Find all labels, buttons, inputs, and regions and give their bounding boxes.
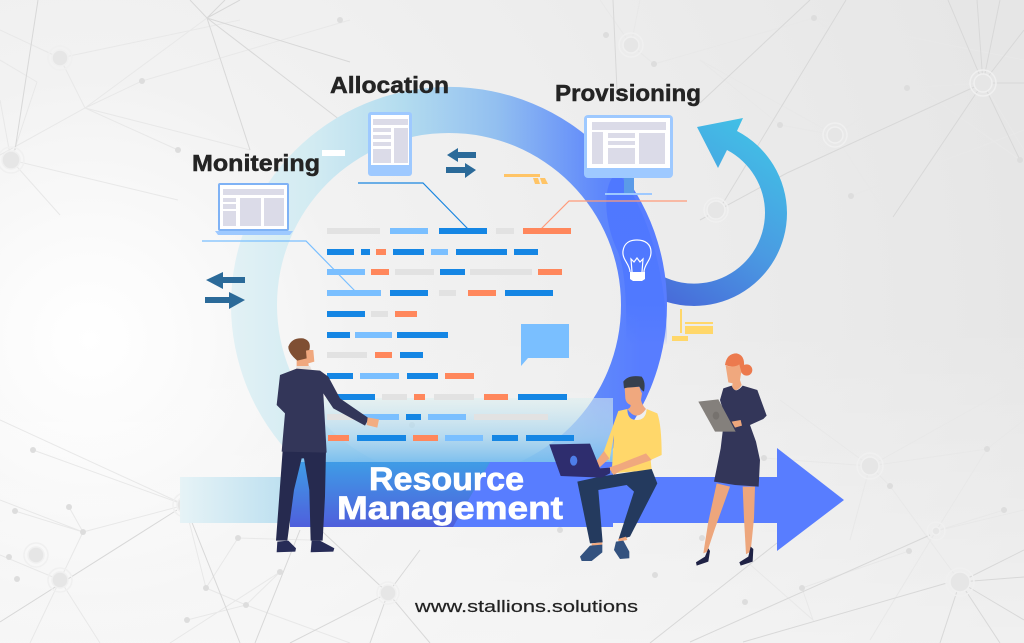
icon: light bulb [623,240,651,281]
heading: Monitering: Monitering [192,150,320,176]
curved arrow [645,118,787,306]
connector lines [202,183,687,291]
person: woman with tablet [696,353,767,566]
big circular ring [231,86,667,460]
code bars chart [327,228,574,441]
website url: www.stallions.solutions [414,597,638,616]
icon: swap arrows left [205,272,245,309]
icon: swap arrows top [446,148,476,178]
title: Resource Management: Management [337,490,563,526]
title: Resource Management: Resource [369,461,524,497]
person: standing man [276,338,379,552]
title: Resource Management [337,461,563,526]
icon: desktop monitor [584,115,673,195]
horizontal arrow [180,448,844,551]
icon: chat bubble [521,324,569,366]
ring overlap shading [606,178,667,345]
icon: tablet [368,112,412,176]
yellow marks top [504,174,548,184]
translucent band in circle [300,398,613,462]
heading: Provisioning: Provisioning [555,80,701,106]
yellow marks right [672,309,713,341]
icon: laptop [215,183,293,235]
person: seated man with laptop [549,376,662,561]
heading: Allocation: Allocation [330,72,449,98]
white dash [322,150,345,156]
